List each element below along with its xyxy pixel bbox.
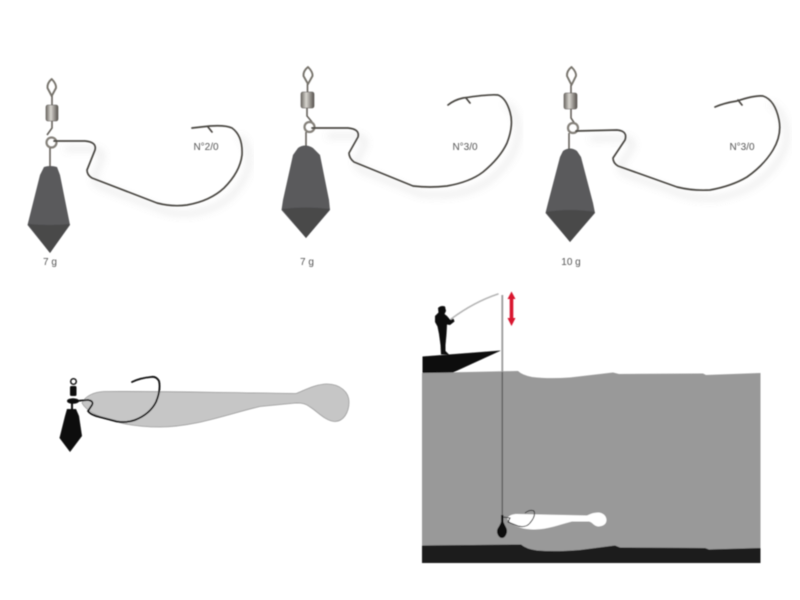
- red up and down arrow: [508, 292, 516, 326]
- hook wire: [54, 126, 242, 206]
- swivel: [46, 79, 58, 167]
- swivel and sinker: [60, 379, 82, 452]
- small sinker: [497, 515, 507, 538]
- small hook: [503, 510, 534, 527]
- sinker: [282, 146, 330, 238]
- fishing scene: [422, 292, 760, 563]
- fisherman silhouette: [435, 306, 454, 354]
- soft bait body: [82, 384, 349, 427]
- hook 3: 10 g N°3/0: [546, 67, 787, 268]
- fishing rod: [451, 294, 498, 319]
- rigged soft bait diagram: [60, 377, 349, 452]
- swivel: [564, 67, 578, 149]
- black hook: [76, 377, 160, 422]
- hook wire: [576, 96, 780, 190]
- hook 2: 7 g N°3/0: [282, 67, 518, 268]
- sinker: [28, 166, 70, 253]
- hook 1: 7 g N°2/0: [28, 79, 249, 268]
- white soft bait: [507, 512, 606, 530]
- weight label: 7 g: [300, 257, 314, 268]
- size label: N°3/0: [729, 142, 755, 153]
- water: [422, 371, 760, 556]
- lake bed: [422, 544, 760, 563]
- sinker: [546, 148, 595, 242]
- weight label: 10 g: [561, 257, 581, 268]
- fishing line: [501, 295, 503, 516]
- small lure in water: [497, 510, 606, 538]
- hook wire: [312, 95, 511, 187]
- size label: N°3/0: [452, 142, 478, 153]
- bank platform: [422, 350, 501, 373]
- weight label: 7 g: [43, 257, 57, 268]
- swivel: [301, 67, 314, 146]
- size label: N°2/0: [193, 142, 219, 153]
